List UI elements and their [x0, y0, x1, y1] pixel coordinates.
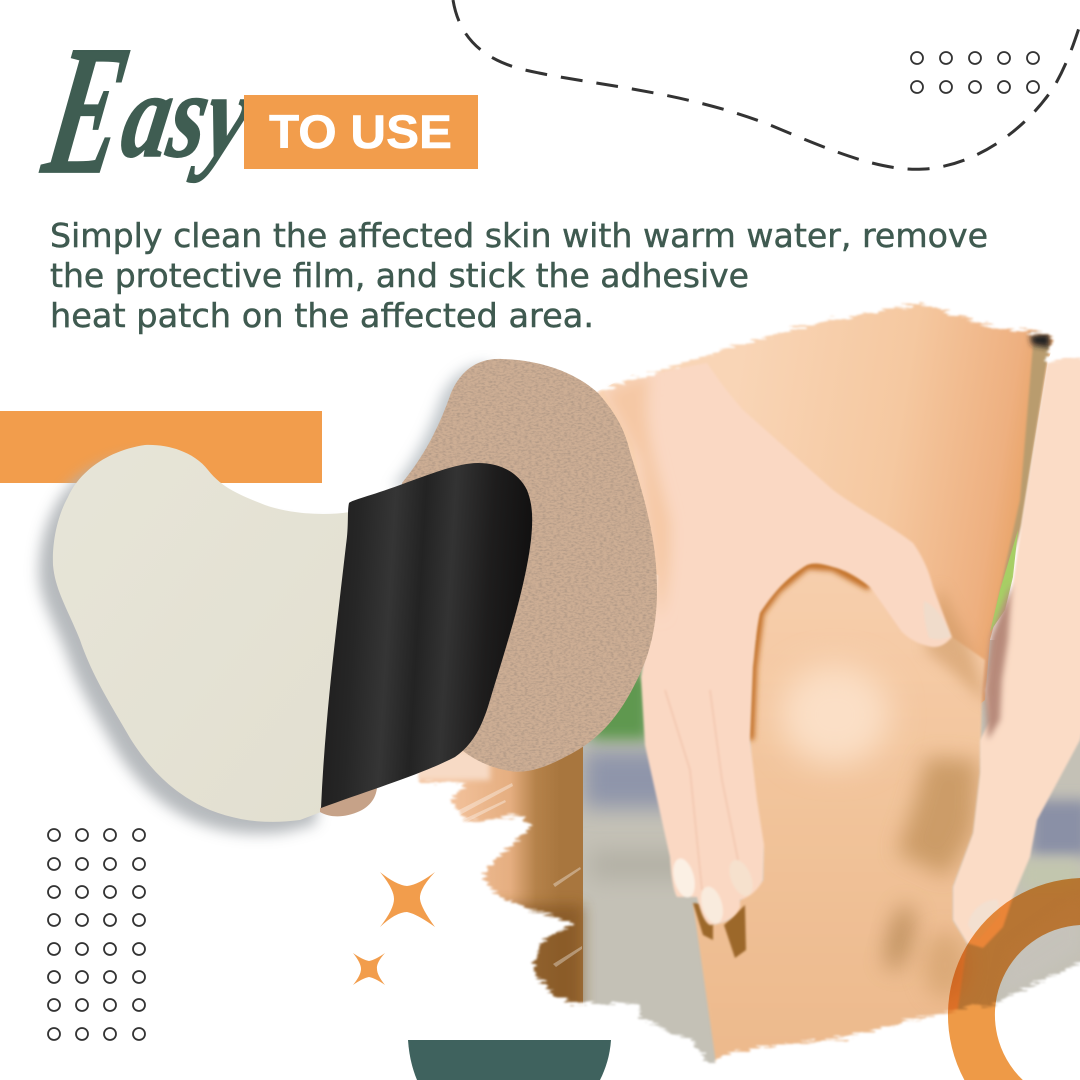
teal half circle — [408, 1040, 611, 1080]
dot grid: bottom left — [48, 829, 145, 1040]
tan patch back — [402, 359, 657, 772]
description text — [50, 216, 988, 335]
photo backdrop — [583, 640, 1080, 1080]
left hand — [604, 363, 952, 926]
right leg and hand — [953, 355, 1080, 948]
orange bar — [0, 411, 322, 483]
peach and brown stroke behind patch — [416, 746, 592, 1008]
description text: Simply clean the affected skin with warm water, remove — [50, 216, 988, 255]
icon: small orange star — [353, 953, 385, 985]
patch shadow — [39, 457, 336, 834]
black peel-off film — [321, 463, 532, 808]
title: Easy — [31, 9, 262, 213]
dot grid: top right — [911, 52, 1039, 93]
title badge: TO USE: TO USE — [269, 105, 452, 158]
product: adhesive heat patch — [39, 359, 657, 834]
title: Easy: asy — [113, 47, 262, 183]
film tip showing tan backing — [320, 782, 377, 816]
black smudge on stroke tip — [1030, 333, 1050, 348]
tan patch shadow — [392, 365, 492, 489]
ring interior haze — [1000, 900, 1080, 1000]
title: Easy: E — [31, 9, 142, 213]
dashed curve — [453, 0, 1080, 169]
photo: hands on knee in brush-stroke frame — [400, 290, 1080, 1080]
icon: large orange star — [380, 872, 435, 927]
title badge: TO USE — [244, 95, 478, 169]
description text: heat patch on the affected area. — [50, 296, 594, 335]
knee highlight and shadows — [693, 565, 988, 999]
description text: the protective film, and stick the adhesive — [50, 256, 749, 295]
ring: orange circle overlay — [948, 878, 1080, 1080]
gap shadow between the legs — [990, 345, 1050, 640]
cream patch front — [53, 445, 350, 822]
green foliage — [990, 530, 1018, 632]
knee — [693, 565, 985, 1070]
thigh — [590, 290, 1060, 720]
